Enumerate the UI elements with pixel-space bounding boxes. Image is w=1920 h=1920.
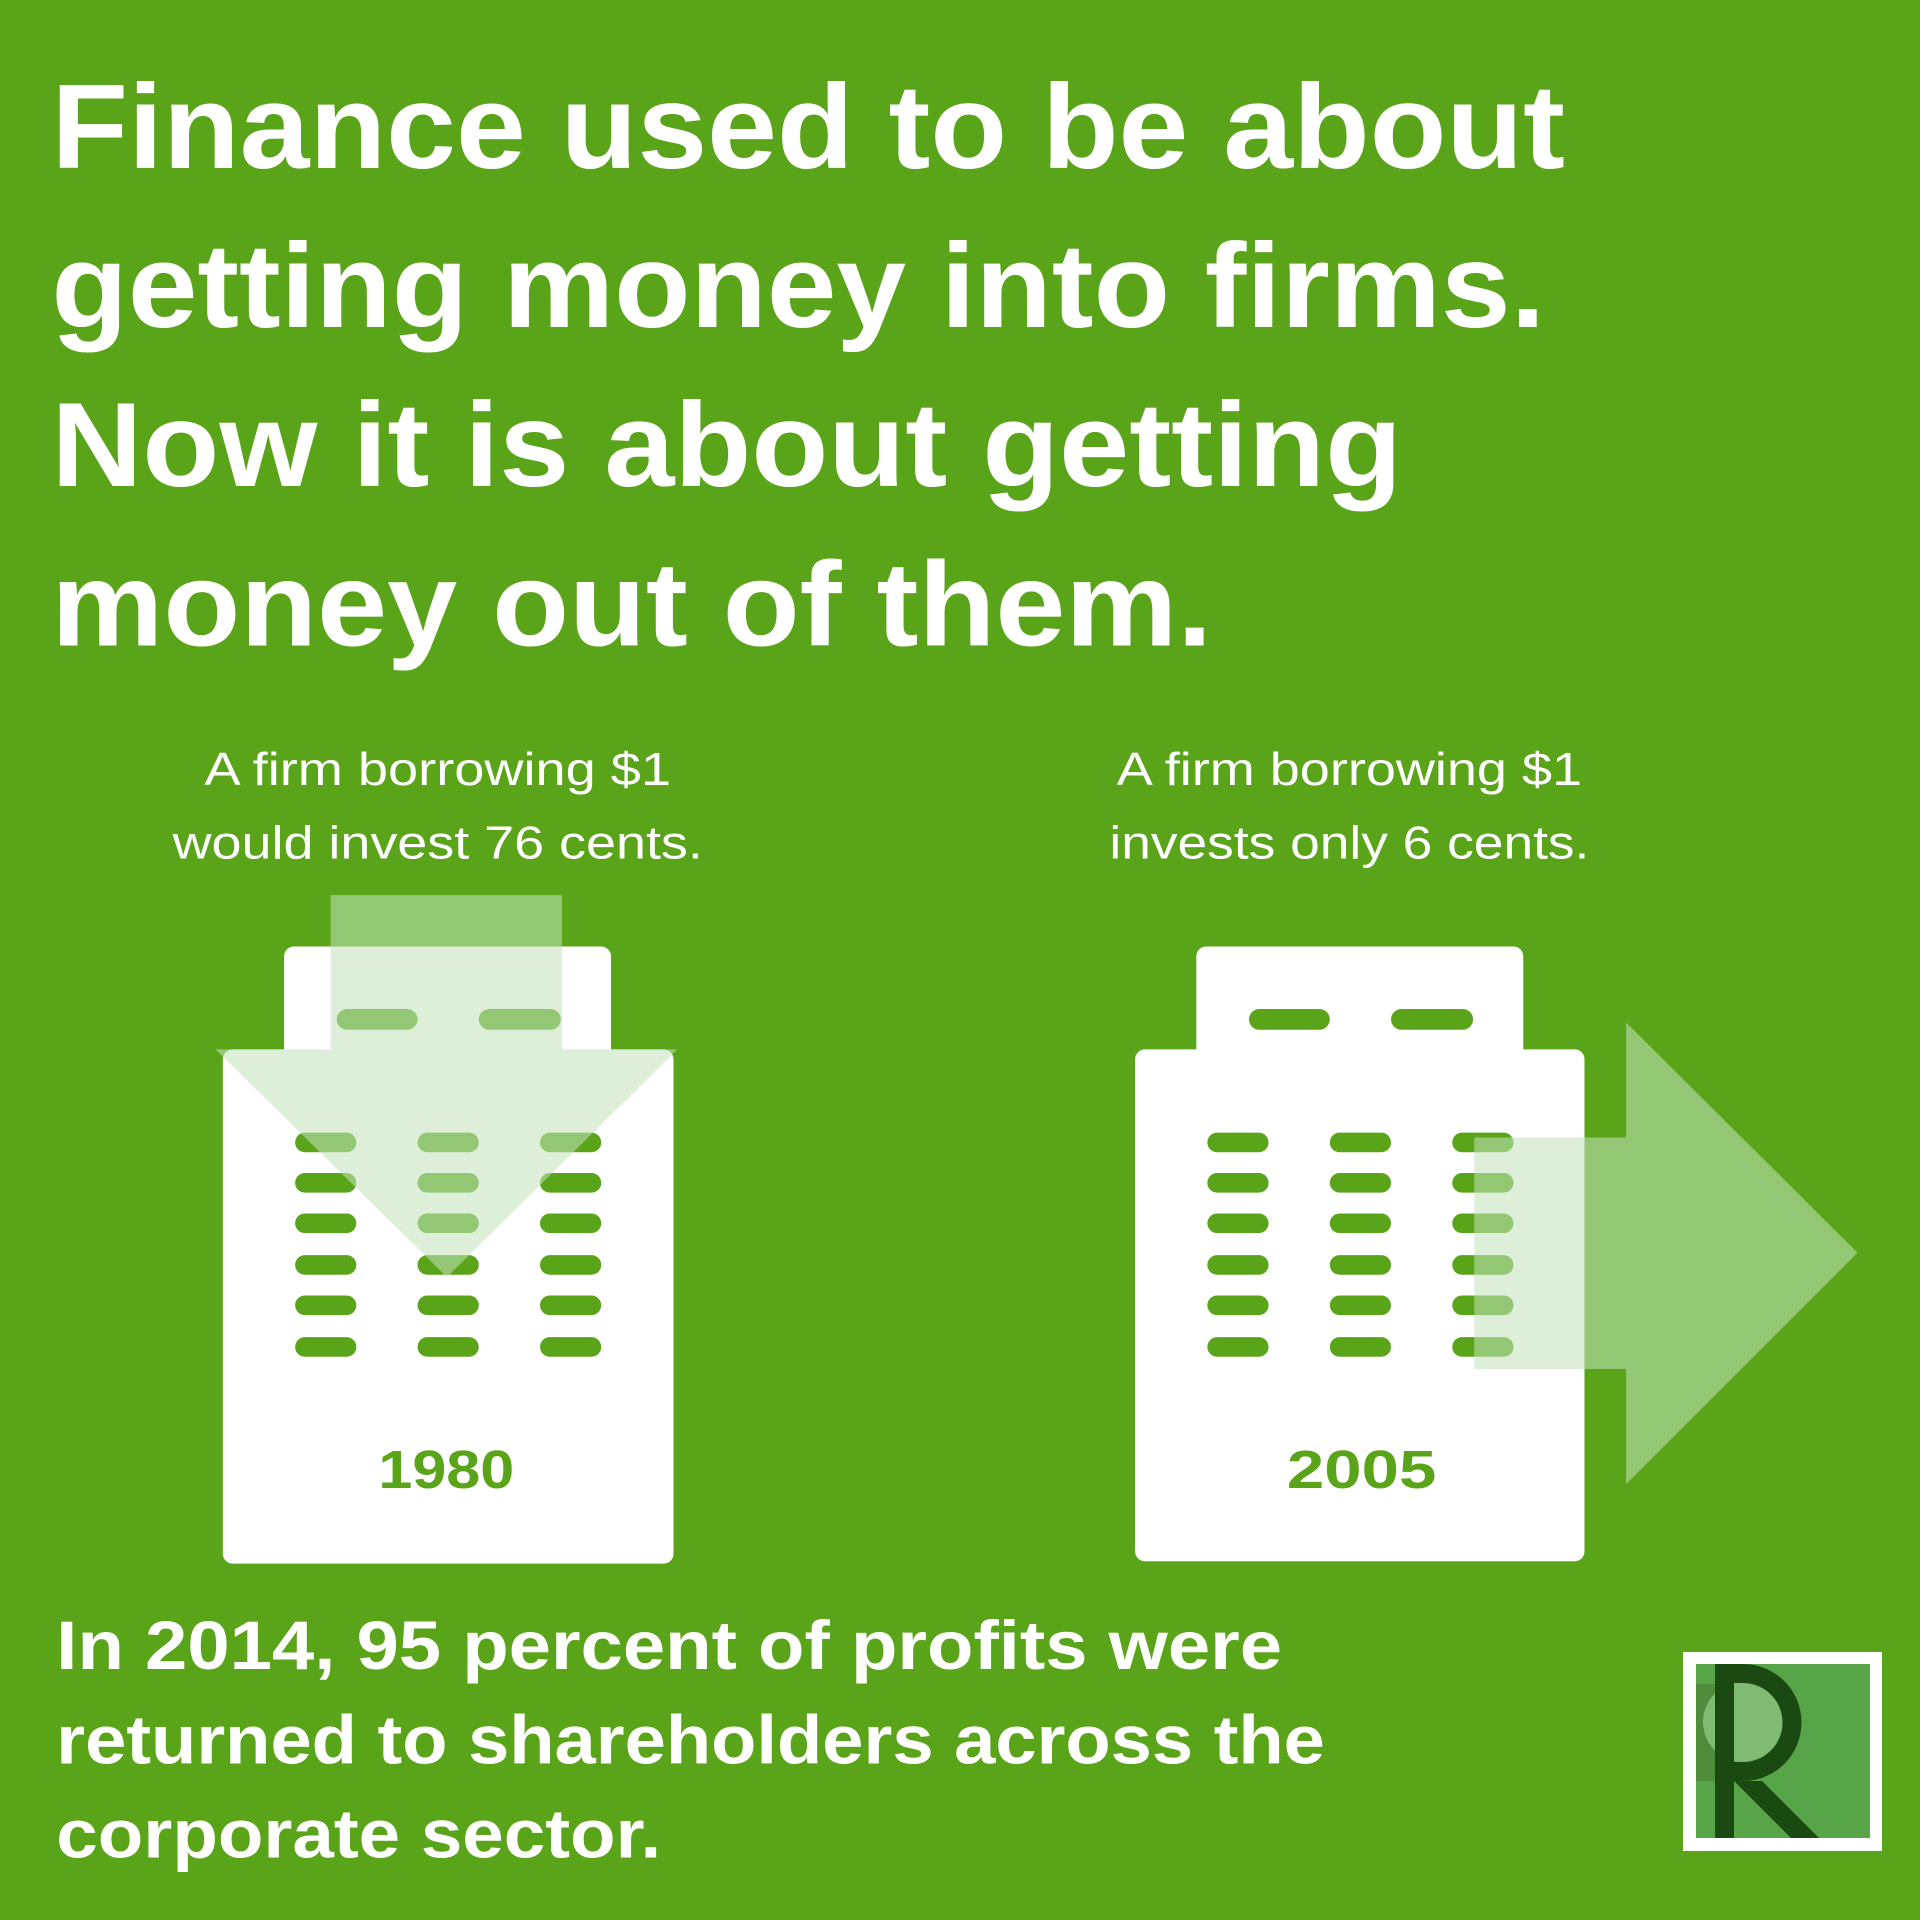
building 2005: 2005: [1287, 1440, 1436, 1500]
building 1980: [223, 947, 673, 1564]
bottom statement: [56, 1607, 1325, 1873]
caption 1980: would invest 76 cents.: [171, 816, 703, 868]
bottom statement: In 2014, 95 percent of profits were: [56, 1607, 1282, 1684]
arrow: money into firm: [216, 895, 677, 1277]
logo: [1683, 1652, 1882, 1851]
title: Finance used to be about: [51, 60, 1565, 194]
building 2005: [1135, 947, 1584, 1561]
title: money out of them.: [51, 537, 1212, 671]
arrow: money out of firm: [1474, 1022, 1858, 1484]
title: [51, 60, 1565, 671]
caption 2005: [1109, 743, 1589, 868]
bottom statement: corporate sector.: [56, 1796, 661, 1873]
title: Now it is about getting: [51, 378, 1402, 512]
caption 1980: [171, 743, 703, 868]
caption 1980: A firm borrowing $1: [204, 743, 671, 795]
building 1980: 1980: [378, 1440, 514, 1500]
caption 2005: invests only 6 cents.: [1109, 816, 1589, 868]
caption 2005: A firm borrowing $1: [1117, 743, 1582, 795]
bottom statement: returned to shareholders across the: [56, 1701, 1325, 1778]
title: getting money into firms.: [51, 219, 1545, 353]
